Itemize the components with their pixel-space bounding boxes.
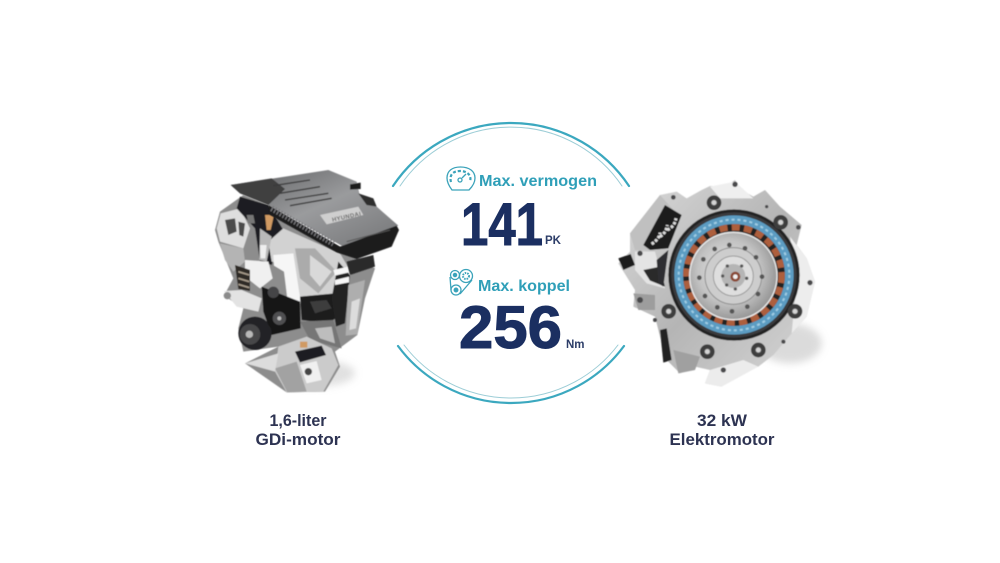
rotor black ring [668, 209, 800, 341]
copper coils [684, 225, 784, 325]
icon: belt pulleys [450, 270, 472, 295]
caption: electric motor [670, 412, 775, 449]
starter motor [275, 337, 338, 392]
unit: PK: PK [545, 235, 562, 247]
value: 256: 256 [459, 294, 562, 361]
top arc [393, 123, 629, 186]
flywheel disc [690, 232, 777, 320]
image: 1.6-liter GDi engine [215, 170, 399, 392]
engine cover: HYUNDAI [332, 212, 362, 224]
caption: engine: GDi-motor [256, 431, 341, 449]
pulleys [238, 317, 272, 350]
caption: engine [256, 412, 341, 449]
housing bolts [637, 182, 813, 373]
blue stator ring [679, 220, 789, 330]
label: Max. vermogen: Max. vermogen [479, 173, 597, 190]
caption: electric motor: Elektromotor [670, 431, 775, 449]
stat: maximum power [447, 167, 597, 258]
bottom arc [398, 345, 624, 403]
disc bolts [697, 243, 764, 314]
engine cover [231, 170, 399, 275]
engine body [215, 195, 375, 392]
unit: Nm: Nm [566, 339, 585, 351]
label: Max. koppel: Max. koppel [478, 278, 570, 295]
caption: electric motor: 32 kW [697, 412, 747, 430]
motor housing [618, 180, 815, 387]
value: 141: 141 [461, 191, 543, 258]
motor shadow [758, 323, 822, 363]
image: 32 kW electric motor [618, 180, 822, 387]
stat: maximum torque [450, 270, 585, 361]
engine shadow [278, 360, 355, 387]
icon: speedometer [447, 167, 475, 190]
bolt lugs [661, 195, 802, 359]
caption: engine: 1,6-liter [270, 412, 327, 430]
